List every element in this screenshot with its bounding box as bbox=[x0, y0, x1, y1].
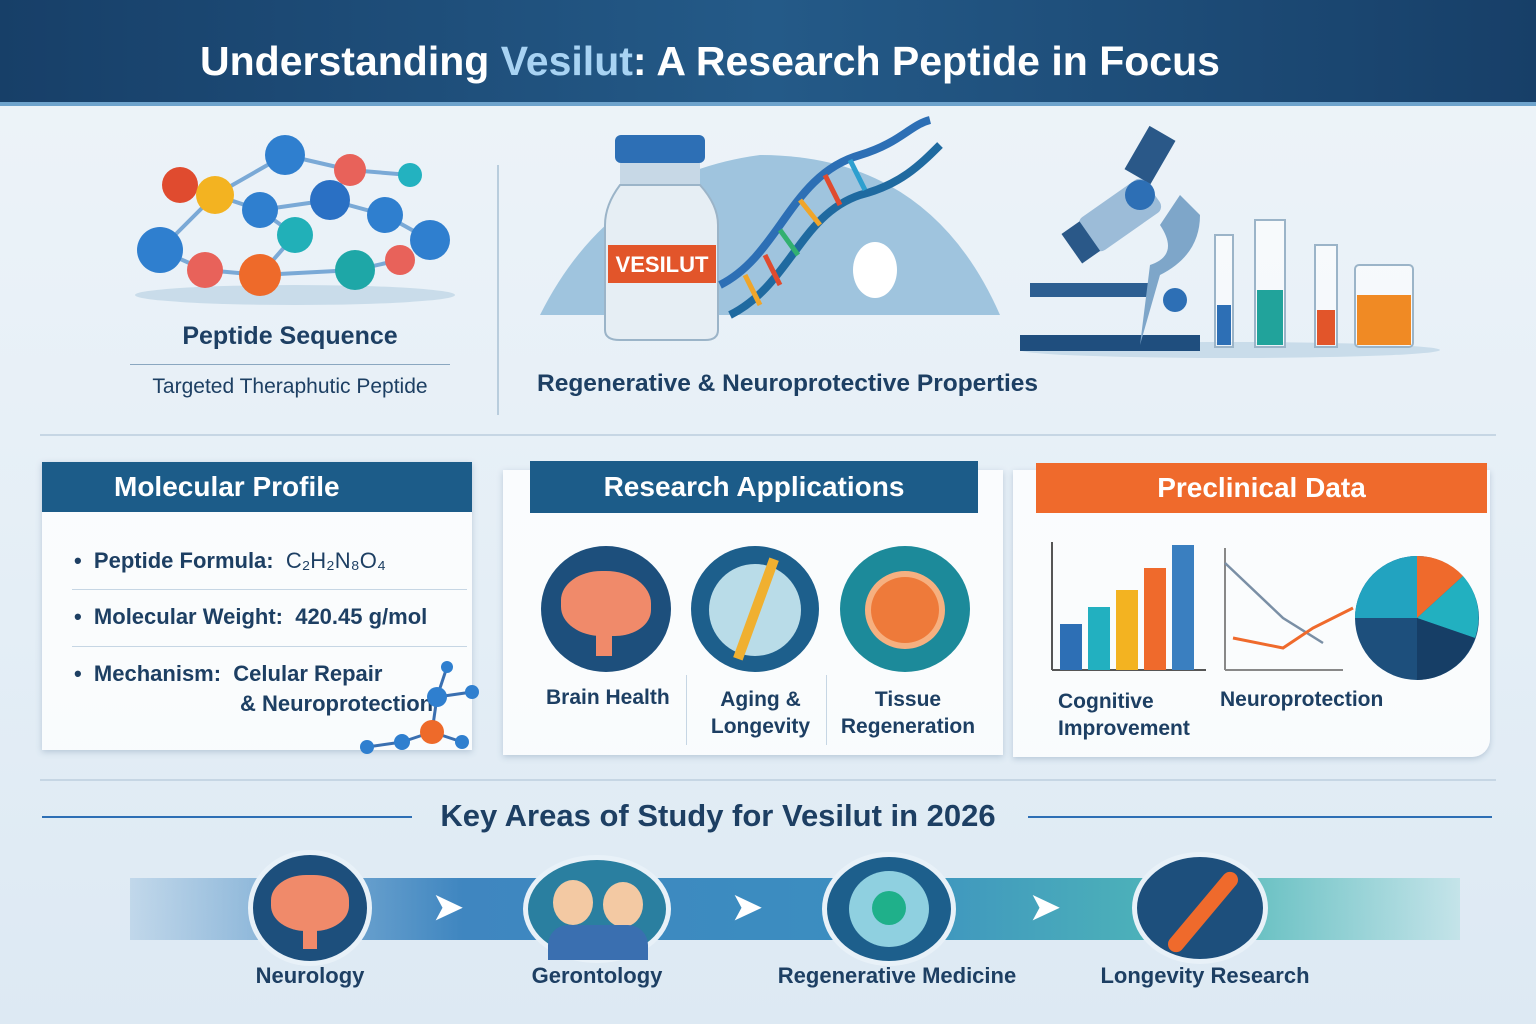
illustration: microscope and tubes bbox=[1020, 126, 1440, 358]
labels: Cognitive bbox=[1058, 690, 1154, 713]
panel: research applications bbox=[503, 470, 1003, 755]
panel: preclinical data: Neuroprotection bbox=[1220, 688, 1383, 711]
text: peptide sequence bbox=[130, 322, 450, 398]
icon: brain bbox=[541, 546, 671, 672]
arrows: ➤ bbox=[433, 886, 463, 927]
labels: Improvement bbox=[1058, 717, 1190, 740]
panel: research applications: Longevity bbox=[711, 715, 810, 738]
icon: regenerative medicine bbox=[822, 852, 956, 966]
heading bbox=[530, 461, 978, 513]
header bar bbox=[0, 0, 1536, 106]
icon: longevity research bbox=[1132, 852, 1268, 964]
icon: tissue bbox=[840, 546, 970, 672]
panel: molecular profile: • Mechanism: Celular Repair bbox=[74, 661, 382, 686]
panel: research applications: Regeneration bbox=[841, 715, 975, 738]
panel: molecular profile: • Molecular Weight: 420.45 g/mol bbox=[74, 604, 427, 629]
heading: Molecular Profile bbox=[114, 471, 340, 502]
heading: Preclinical Data bbox=[1157, 472, 1366, 503]
line chart and pie bbox=[1224, 548, 1479, 680]
labels: Neurology bbox=[256, 963, 364, 988]
panel: preclinical data bbox=[1013, 470, 1490, 757]
icon: aging dna bbox=[691, 546, 819, 672]
icon: gerontology bbox=[523, 855, 671, 963]
panel: research applications: Aging & bbox=[720, 688, 801, 711]
text: ➤ bbox=[1030, 886, 1060, 927]
icon: neurology bbox=[248, 850, 372, 966]
illustration: vial and DNA bbox=[540, 116, 1000, 341]
text: peptide sequence: Targeted Theraphutic Peptide bbox=[152, 375, 428, 398]
timeline band bbox=[130, 878, 1460, 940]
panel: molecular profile bbox=[42, 462, 472, 750]
labels: Brain Health bbox=[546, 686, 670, 709]
text: peptide sequence: Peptide Sequence bbox=[182, 322, 398, 350]
title: Understanding Vesilut: A Research Peptide in Focus bbox=[200, 38, 1220, 84]
heading bbox=[42, 462, 472, 512]
list items: • Peptide Formula: C₂H₂N₈O₄ bbox=[74, 548, 386, 573]
heading: Research Applications bbox=[604, 471, 904, 502]
illustration: vial and DNA: VESILUT bbox=[616, 252, 709, 277]
heading bbox=[1036, 463, 1487, 513]
panel: molecular profile: & Neuroprotection bbox=[240, 691, 433, 716]
section heading: key areas: Key Areas of Study for Vesilut in 2026 bbox=[440, 798, 996, 833]
labels bbox=[1058, 690, 1190, 740]
text: Longevity Research bbox=[1100, 963, 1310, 988]
text: Regenerative Medicine bbox=[778, 963, 1016, 988]
molecule illustration bbox=[135, 135, 455, 305]
text: ➤ bbox=[732, 886, 762, 927]
panel: research applications: Tissue bbox=[875, 688, 941, 711]
text: Gerontology bbox=[532, 963, 662, 988]
text: regenerative properties: Regenerative & Neuroprotective Properties bbox=[537, 370, 1038, 397]
icon: small molecule bbox=[360, 661, 479, 754]
bar chart bbox=[1051, 542, 1206, 671]
